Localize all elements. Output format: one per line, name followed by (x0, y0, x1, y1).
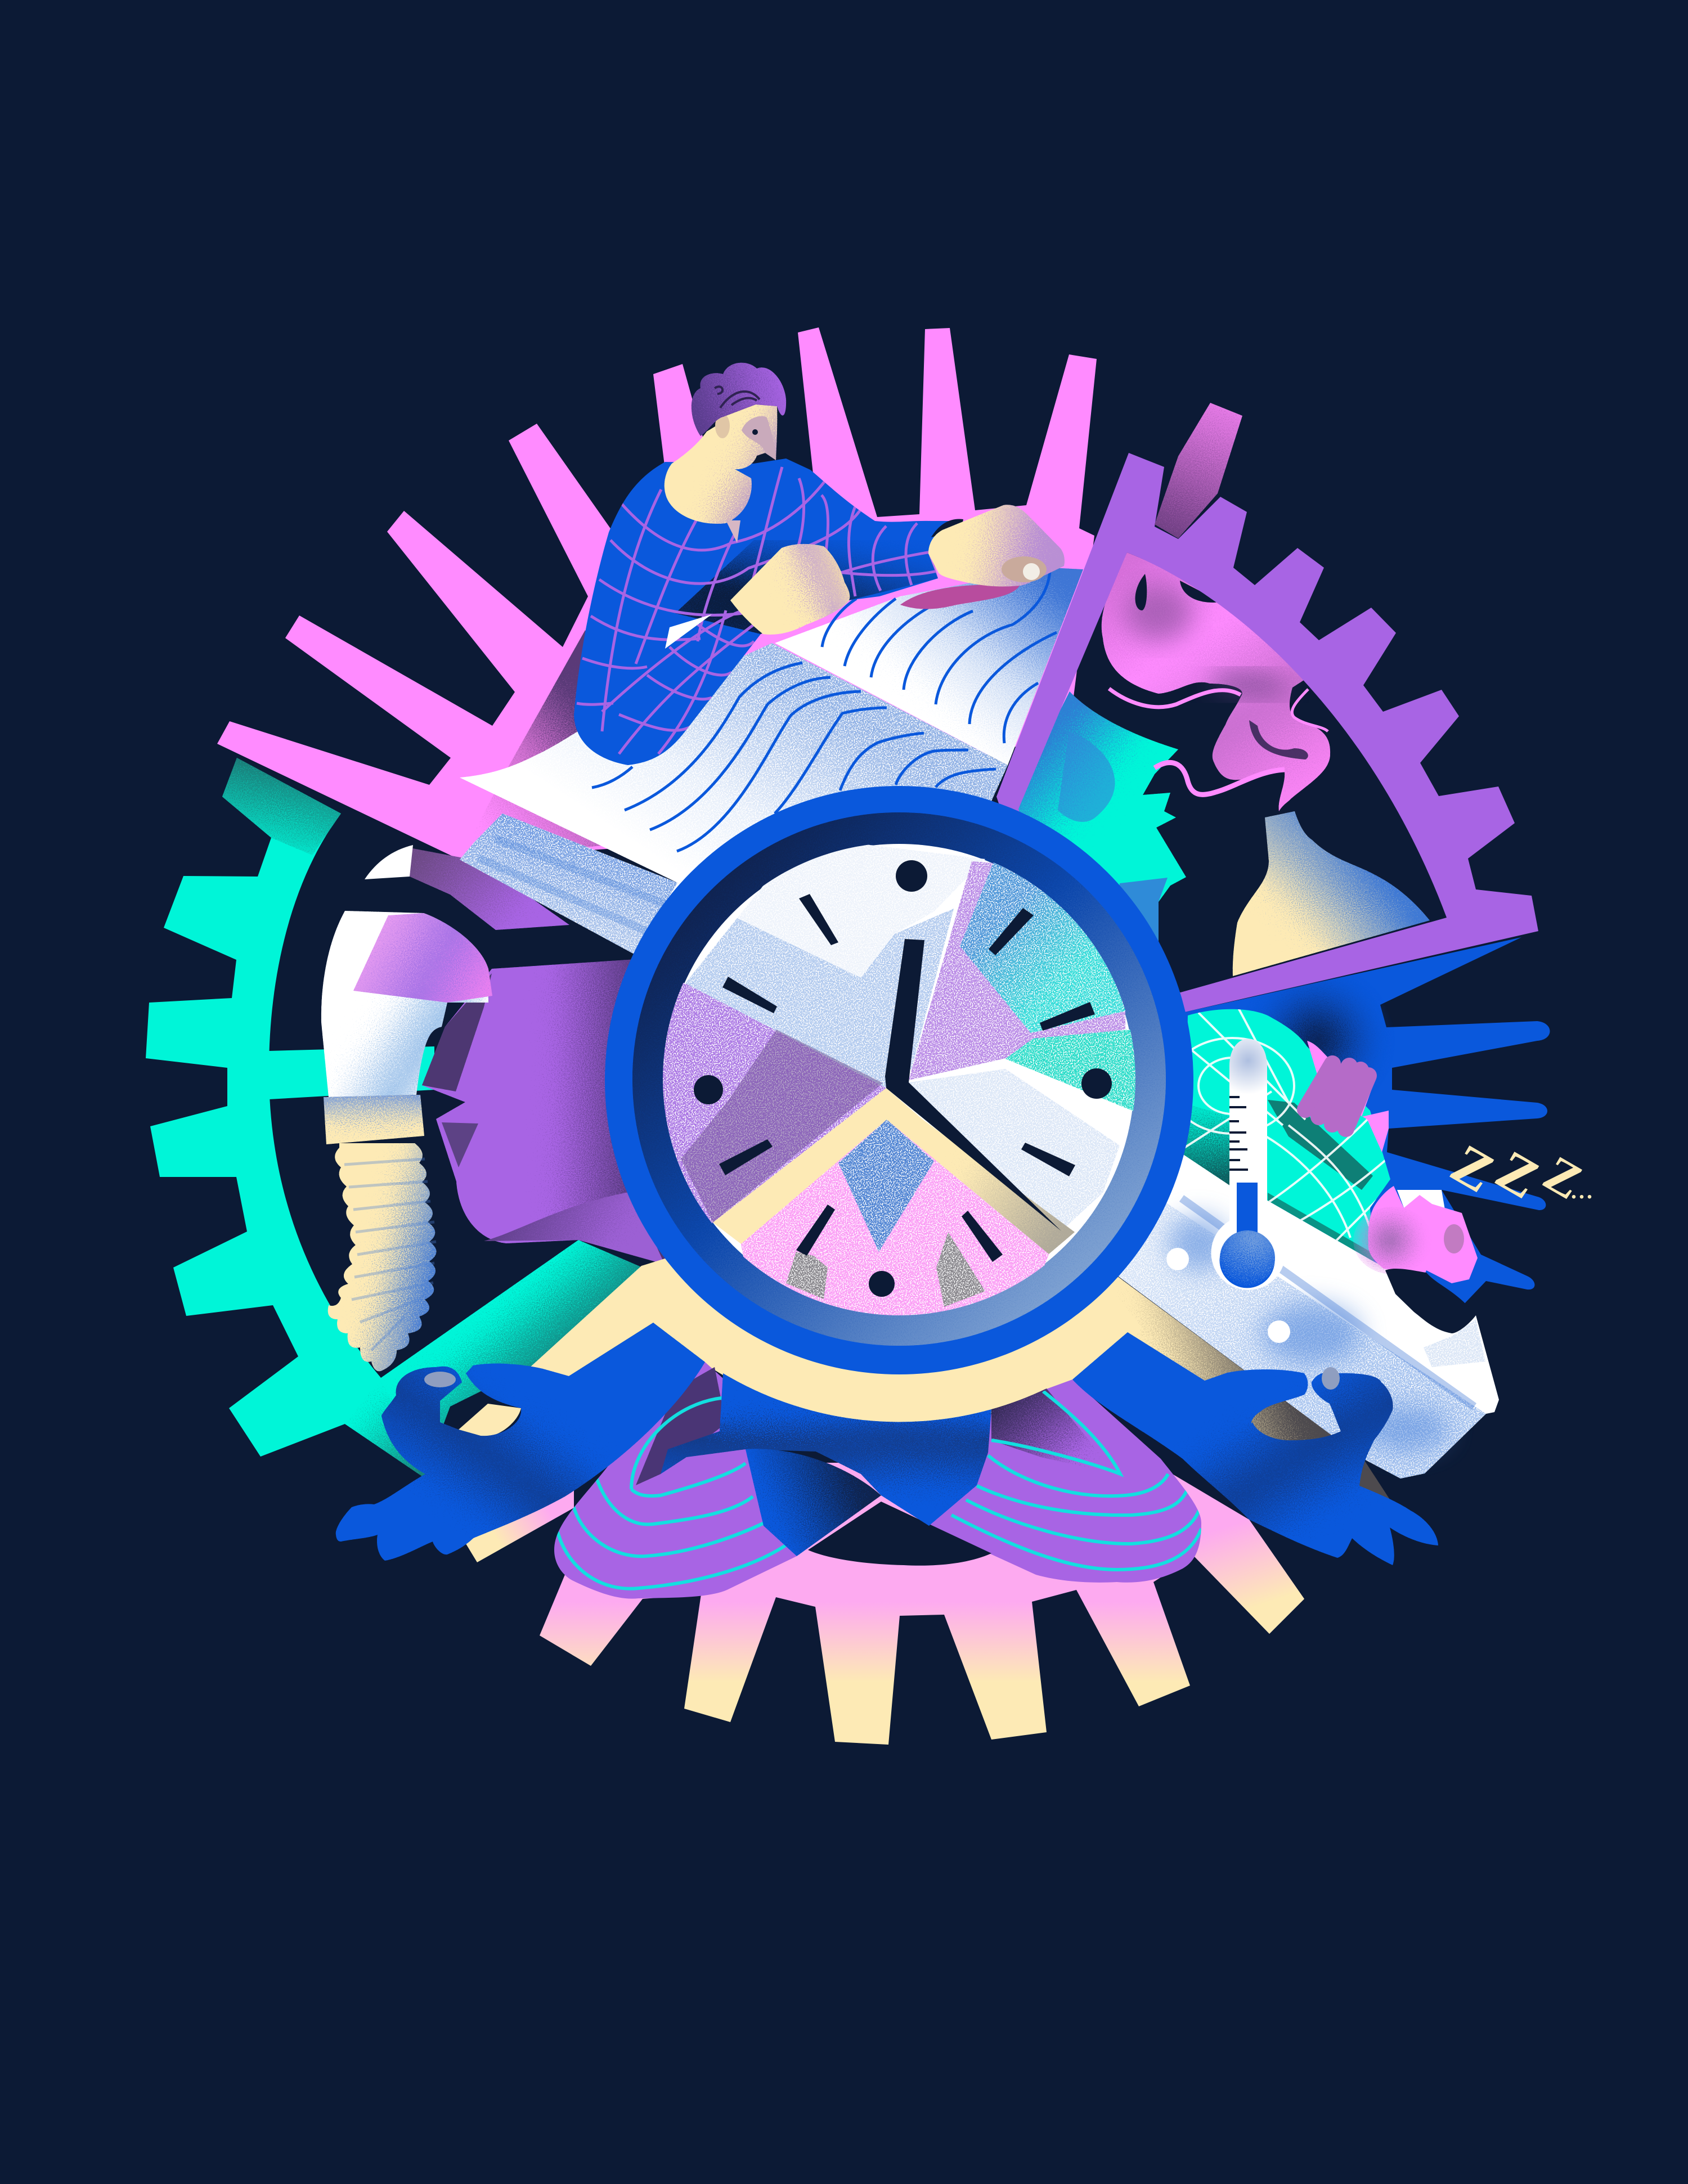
7 o'clock tick (796, 1205, 835, 1256)
white arc above pipe (365, 845, 413, 879)
finger two (1319, 1066, 1349, 1117)
sleeping person (1170, 1007, 1485, 1367)
nostril soft shadow (1125, 585, 1193, 641)
dark arc spot (1180, 581, 1221, 603)
1 o'clock tick (989, 908, 1034, 955)
blue patch near thermometer (1168, 1215, 1229, 1271)
open book (460, 568, 1499, 1479)
hair curls (715, 387, 760, 408)
bottom gear teeth and ring (540, 1463, 1304, 1745)
white knot lower (1268, 1320, 1290, 1343)
smoke wisp to nose (1155, 762, 1285, 794)
white collar (1397, 1190, 1445, 1215)
cuff (931, 519, 963, 537)
right stack streak (1182, 1198, 1474, 1406)
head shadow at chin (484, 1192, 665, 1264)
vase (1233, 811, 1430, 976)
right leg stripes (951, 1391, 1201, 1570)
left purple wedge (619, 956, 886, 1294)
left hand (336, 1323, 705, 1561)
dark swirl in plume (1249, 720, 1308, 760)
torso (1184, 1009, 1390, 1261)
right stripe curves (951, 1391, 1201, 1570)
head shadow at lip (442, 1122, 478, 1167)
teal gear shaded top end (222, 758, 341, 855)
book base white (460, 814, 1499, 1479)
letter Z: Z (1441, 1132, 1505, 1205)
cream disc behind clock (529, 1238, 1142, 1422)
left page (460, 643, 1008, 978)
torso grid lines (1170, 1007, 1387, 1243)
thermometer scale (1229, 1097, 1248, 1170)
left stripe curves (558, 1397, 785, 1589)
fist (730, 544, 850, 635)
pipe collar (324, 1095, 424, 1144)
bottom gear right tooth tint (1194, 1508, 1304, 1634)
torso shadow (1182, 1103, 1232, 1187)
blue gear teeth (1182, 937, 1550, 1305)
right stack blue patches (1168, 1215, 1449, 1451)
thumbnail (1023, 563, 1040, 580)
torso fold (1268, 1100, 1373, 1190)
blue diamond (838, 1120, 934, 1252)
thermometer (1211, 1039, 1285, 1290)
thumb (1002, 556, 1047, 582)
torso grid curves (1197, 1057, 1231, 1115)
teal upper wedge (960, 833, 1142, 1033)
white flap under hair (1424, 1319, 1485, 1367)
left page lines (592, 663, 996, 851)
blue patch lower (1260, 1302, 1362, 1364)
teal diagonal spoke (381, 1240, 647, 1477)
6 o'clock dot (869, 1271, 895, 1297)
left page stack (460, 814, 677, 954)
pipe elbow pink section (353, 913, 492, 1003)
illustration: clock and gears composition (146, 327, 1595, 1745)
left fingertip (424, 1372, 456, 1387)
clock face wedges (619, 833, 1142, 1350)
threaded screw (328, 1143, 437, 1371)
teal head profile, smelling (1007, 691, 1186, 956)
teal horizontal spoke (269, 1046, 434, 1099)
right page lines (822, 568, 1057, 743)
head shading (1353, 1207, 1432, 1274)
left leg (554, 1362, 797, 1599)
right page stack (1057, 1176, 1486, 1479)
right hand (1072, 1332, 1438, 1565)
smoke wisp right (1292, 689, 1328, 731)
plum shadow under arm (900, 585, 1020, 609)
finger four (1346, 1076, 1368, 1129)
bottom pink wedge (741, 1120, 1049, 1350)
man leaning over the book (574, 363, 1065, 765)
inner leg shadow left (636, 1367, 726, 1485)
10 o'clock tick (722, 977, 777, 1013)
thermometer bulb (1220, 1230, 1275, 1286)
teal gear teeth and ring (146, 758, 424, 1477)
left purple wedge shadow (681, 1030, 883, 1223)
hair (1385, 1269, 1476, 1333)
shirt shadow (675, 540, 938, 634)
plum shape above head (410, 848, 569, 930)
robe center (661, 1373, 991, 1526)
pink gear, top (217, 327, 1097, 860)
finger three (1332, 1070, 1361, 1124)
snore letters (1441, 1132, 1595, 1211)
9 o'clock dot (694, 1075, 723, 1104)
left leg stripes (558, 1397, 785, 1589)
white page gap by elbow (665, 614, 712, 649)
hour markers (694, 860, 1112, 1297)
letter Z: Z (1486, 1138, 1550, 1211)
right page (775, 568, 1083, 765)
cream bands (713, 1088, 1075, 1254)
teal gear, left (146, 758, 647, 1485)
clock hands (885, 939, 1061, 1231)
grey shape right (936, 1232, 985, 1307)
smoke wisp left (1109, 689, 1241, 707)
bottom gear (466, 1463, 1304, 1745)
page edge streak (478, 838, 670, 934)
pink gear shadow by the book (460, 630, 619, 860)
white knots on stack (1166, 1248, 1189, 1270)
dark nostril spot (1135, 574, 1147, 610)
inner leg shadow (991, 1388, 1117, 1474)
hair (692, 363, 786, 436)
right purple wedge (909, 861, 1125, 1080)
pipe elbow white (321, 911, 488, 1097)
meditating figure (336, 1323, 1438, 1599)
smoke plume (1102, 552, 1330, 811)
head shadow at nose (422, 973, 492, 1091)
clock face base (664, 844, 1134, 1314)
face shape (1007, 691, 1186, 956)
teal lower wedge (1005, 1029, 1142, 1114)
shaded eye socket and nose (742, 416, 776, 460)
page text lines (592, 568, 1057, 851)
plume soft shadow (1210, 673, 1289, 696)
teal gear shaded bottom end (345, 1378, 450, 1485)
pink tooth over purple gear (1155, 403, 1242, 538)
ear (1444, 1224, 1464, 1253)
thermometer tube (1211, 1039, 1285, 1290)
top wedge book band (685, 909, 954, 1088)
grey shape left (786, 1252, 828, 1299)
pink gear teeth (217, 327, 1097, 860)
3 o'clock dot (1081, 1068, 1112, 1099)
clock (605, 786, 1193, 1374)
center hole (808, 1502, 991, 1566)
8 o'clock tick (719, 1139, 773, 1175)
leaf shading (1058, 731, 1115, 822)
wrist (1307, 1041, 1389, 1152)
eye (752, 429, 758, 435)
shirt (574, 459, 950, 765)
right book band (909, 1069, 1120, 1231)
blue patch right end (1364, 1406, 1449, 1451)
ear (715, 414, 730, 438)
V neck (726, 520, 740, 543)
thermometer mercury column (1220, 1183, 1275, 1288)
neck and face (665, 405, 777, 524)
robe left fold (746, 1449, 881, 1556)
purple head profile (422, 959, 670, 1266)
blue gear shadow (1238, 962, 1395, 1120)
shirt grid lines (577, 467, 937, 754)
finger one (1305, 1064, 1332, 1109)
left head profile with pipe (321, 845, 670, 1371)
blue throat shading (1114, 878, 1168, 945)
right fingertip (1322, 1367, 1340, 1390)
12 o'clock dot (896, 860, 927, 892)
clock outer ring (605, 786, 1193, 1374)
2 o'clock tick (1040, 1002, 1095, 1031)
screw thread lines (344, 1159, 436, 1350)
ellipsis: ... (1571, 1178, 1595, 1203)
purple gear (996, 453, 1538, 1013)
blue gear, right (1182, 937, 1550, 1305)
right leg (929, 1379, 1201, 1583)
letter Z: Z (1534, 1145, 1591, 1210)
shirt grid curves (577, 467, 937, 754)
right hand (928, 505, 1065, 586)
5 o'clock tick (962, 1211, 1003, 1262)
top wedge upper page (737, 844, 985, 978)
4 o'clock tick (1021, 1143, 1075, 1176)
far left tooth (466, 1463, 574, 1562)
torso lower shade (1268, 1193, 1373, 1261)
beige shadow under the book (1058, 1232, 1394, 1506)
11 o'clock tick (799, 894, 838, 945)
clock inner bezel (632, 812, 1166, 1346)
cream crescent in left hand (459, 1404, 521, 1436)
head (1368, 1186, 1478, 1292)
smoke rising from the vase (1102, 552, 1330, 811)
fingers (1305, 1064, 1368, 1129)
